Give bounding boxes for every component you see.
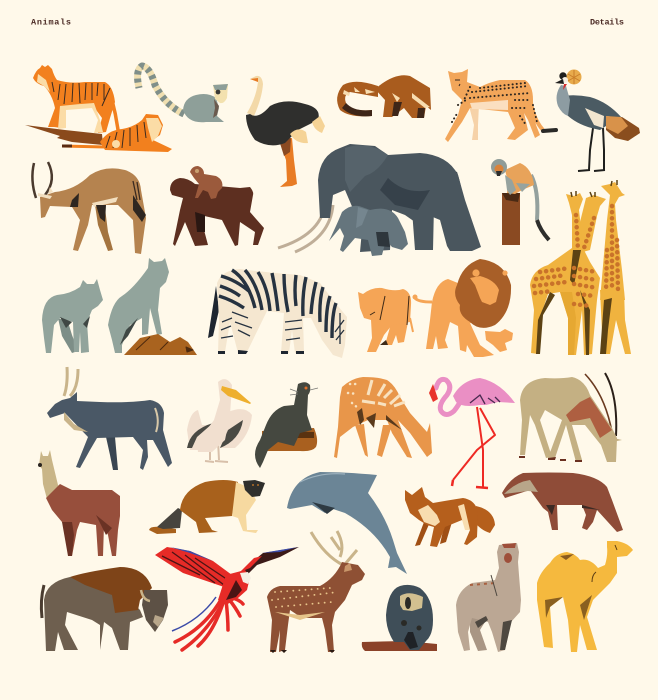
head [142, 590, 168, 632]
horns [32, 162, 52, 198]
back speckles [470, 583, 495, 585]
body [334, 377, 432, 458]
body [47, 392, 172, 470]
neck and head [436, 379, 460, 414]
dark leg [157, 508, 182, 529]
standing tiger body [33, 65, 115, 133]
post [502, 193, 520, 245]
tusks [278, 205, 333, 252]
body [46, 484, 120, 556]
animal: ring-tailed lemur [138, 66, 228, 122]
tail [473, 506, 495, 533]
body [246, 101, 319, 145]
animal: jackal [405, 487, 495, 547]
animal: monkey on post [491, 159, 549, 245]
head [491, 159, 507, 175]
animal: tapir [502, 472, 623, 532]
tail feathers [175, 597, 243, 650]
horns [64, 367, 78, 396]
heading: Details: Details [590, 18, 624, 28]
otter [255, 382, 312, 468]
far rear leg [412, 205, 434, 250]
spots [452, 83, 531, 125]
body [445, 69, 540, 142]
animal: dark antelope [47, 367, 172, 470]
lying tiger body [100, 114, 172, 152]
ossicones [571, 180, 617, 197]
animal: tigers on a log [25, 65, 172, 152]
spots [272, 588, 338, 607]
animal: scarlet macaw [155, 547, 299, 650]
stripes [219, 270, 336, 338]
far leg [95, 205, 113, 251]
animal: otter on log [255, 382, 318, 468]
far leg [106, 437, 118, 470]
animal: dolphin [287, 472, 407, 574]
dark leg shadows [475, 616, 512, 650]
beak [429, 384, 438, 402]
far legs [385, 320, 408, 345]
head [213, 84, 228, 103]
calf [329, 206, 408, 256]
body [267, 562, 365, 652]
tail [410, 318, 413, 332]
left giraffe neck and head [566, 193, 584, 270]
body and neck [197, 379, 232, 452]
right giraffe neck and head [600, 182, 625, 300]
body [386, 585, 433, 650]
body [375, 75, 431, 118]
head [243, 480, 265, 497]
body [405, 487, 478, 547]
left wing [187, 410, 215, 450]
legs [205, 440, 228, 462]
tail [530, 95, 543, 130]
lying tiger tail [62, 146, 105, 147]
tail [337, 82, 378, 116]
tail [415, 298, 432, 302]
giraffe spots [534, 206, 618, 306]
head [240, 572, 251, 584]
body [183, 94, 224, 122]
body [217, 269, 347, 358]
log [262, 428, 317, 451]
ape body [170, 178, 264, 246]
animal: giraffes [530, 180, 631, 355]
animal: cheetah [445, 69, 556, 142]
flipper [312, 502, 335, 514]
right giraffe legs [600, 290, 631, 354]
legs [578, 128, 605, 171]
animal: camel [537, 541, 633, 652]
heading: Animals: Animals [31, 18, 71, 28]
legs [279, 138, 297, 187]
body [453, 378, 515, 406]
body and head [358, 288, 411, 352]
far legs [415, 522, 452, 546]
tail [41, 585, 44, 618]
log [25, 125, 103, 145]
animal: crowned crane [555, 70, 640, 171]
animal: sifaka lemur [149, 480, 265, 534]
hands [401, 620, 407, 626]
shadows [536, 250, 612, 355]
left giraffe body [530, 248, 600, 355]
mane [455, 259, 511, 328]
crown [566, 70, 582, 84]
far legs [470, 615, 488, 651]
body and legs [426, 279, 494, 357]
rear light leg [469, 104, 479, 140]
legs [453, 407, 495, 487]
animal: pelican [187, 379, 252, 462]
animal: flamingo [429, 378, 515, 488]
tail [606, 117, 640, 141]
crown [502, 543, 516, 548]
animal: lioness [358, 288, 413, 352]
body [520, 377, 617, 462]
eye [304, 386, 308, 390]
animal: spotted orange antelope [334, 377, 432, 458]
cream chest [418, 504, 470, 530]
animal: elephant and calf [278, 144, 481, 256]
tail [531, 175, 537, 220]
rock [124, 334, 197, 355]
baby [190, 166, 222, 199]
elephant body [318, 144, 481, 252]
animal: llama [38, 450, 120, 556]
right wing [240, 547, 299, 574]
left wing [155, 547, 238, 590]
body [40, 168, 146, 254]
wing plumes [290, 129, 308, 143]
body [505, 163, 534, 194]
body [218, 570, 250, 605]
animal: ostrich [246, 76, 325, 187]
body [456, 543, 521, 652]
wolf 1 [42, 279, 103, 353]
animal: alpaca [456, 543, 521, 652]
animal: grey wolves on rock [42, 258, 197, 355]
far legs [355, 424, 392, 457]
head [559, 72, 567, 80]
log [362, 641, 437, 651]
ear [345, 145, 388, 192]
horns [585, 374, 612, 432]
red-brown neck patch [566, 397, 612, 438]
animal: antelope [32, 162, 146, 254]
animal: saki monkey on log [362, 585, 437, 651]
tail [456, 172, 464, 215]
tail [149, 527, 176, 534]
mane [70, 567, 152, 613]
cub [485, 329, 513, 352]
body [44, 577, 143, 651]
animal: coati [337, 75, 431, 118]
muzzle [504, 553, 512, 563]
stripes [362, 380, 405, 406]
beak [221, 386, 251, 404]
head and neck [39, 450, 62, 499]
wolf 1 far legs [58, 318, 78, 353]
antlers [311, 531, 357, 565]
wolf 2 [108, 258, 169, 353]
animal: ape with baby [170, 166, 264, 246]
tail [208, 286, 219, 338]
standing tiger tail [112, 100, 118, 130]
tail [138, 66, 184, 114]
face [400, 593, 423, 611]
body [180, 480, 238, 533]
body [561, 95, 622, 130]
animal: lion with cub [412, 259, 513, 357]
animal: oryx [519, 373, 622, 462]
animal: bison [41, 567, 168, 651]
animal: zebra [208, 269, 347, 358]
middle giraffe neck and head [572, 195, 606, 255]
face [470, 276, 499, 305]
cream chest [232, 482, 258, 533]
right wing [220, 409, 252, 448]
neck and head [247, 76, 263, 116]
animal: spotted deer [267, 531, 365, 653]
